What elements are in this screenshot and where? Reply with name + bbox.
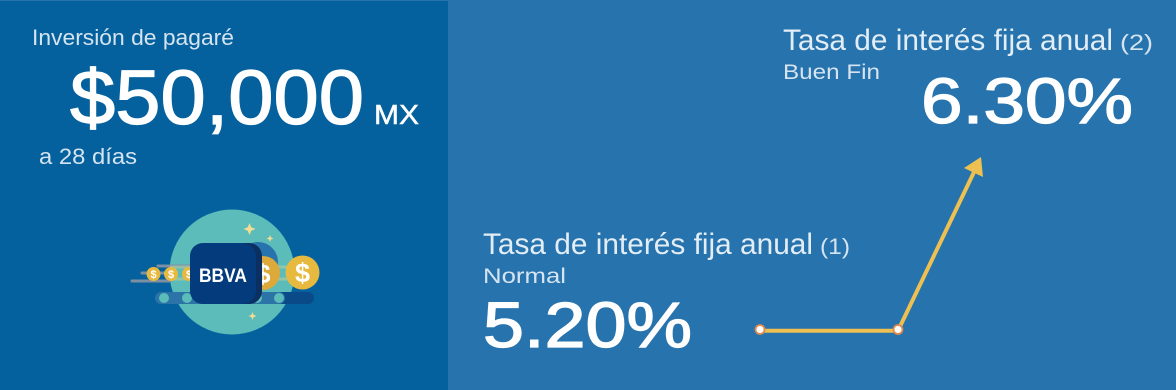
heading: Buen Fin rate: Tasa de interés fija anual	[783, 24, 1113, 57]
text: currency: MX	[374, 99, 419, 130]
small coins	[146, 267, 196, 281]
speed lines	[132, 266, 190, 281]
icon: BBVA coins conveyor	[132, 210, 320, 334]
text: inversion label: Inversión de pagaré	[32, 25, 234, 50]
text: amount: $50,000	[70, 55, 364, 141]
value: 5.20%: 5.20%	[483, 289, 692, 361]
blue disc behind logo	[238, 242, 278, 282]
label: Buen Fin: Buen Fin	[783, 61, 880, 84]
text block: Buen Fin rate	[783, 24, 1153, 137]
text: term: a 28 días	[39, 144, 137, 169]
small coins: $	[150, 269, 157, 281]
icon: BBVA coins conveyor: BBVA	[199, 266, 247, 287]
large coins: $	[255, 259, 271, 289]
logo tile	[193, 243, 262, 304]
note 2: (2)	[1120, 30, 1153, 55]
text block: normal rate	[483, 228, 850, 361]
large coins: $	[295, 258, 310, 288]
sparkles	[244, 223, 274, 320]
label: normal: Normal	[483, 265, 566, 288]
heading: normal rate: Tasa de interés fija anual	[483, 228, 813, 261]
small coins: $	[168, 269, 174, 281]
large coins	[246, 256, 320, 290]
panel: investment	[0, 1, 448, 390]
small coins: $	[186, 269, 192, 281]
value: 6.30%: 6.30%	[921, 65, 1133, 137]
note 1: (1)	[820, 234, 850, 259]
arrow: rate increase	[756, 157, 983, 334]
conveyor belt	[155, 292, 314, 304]
